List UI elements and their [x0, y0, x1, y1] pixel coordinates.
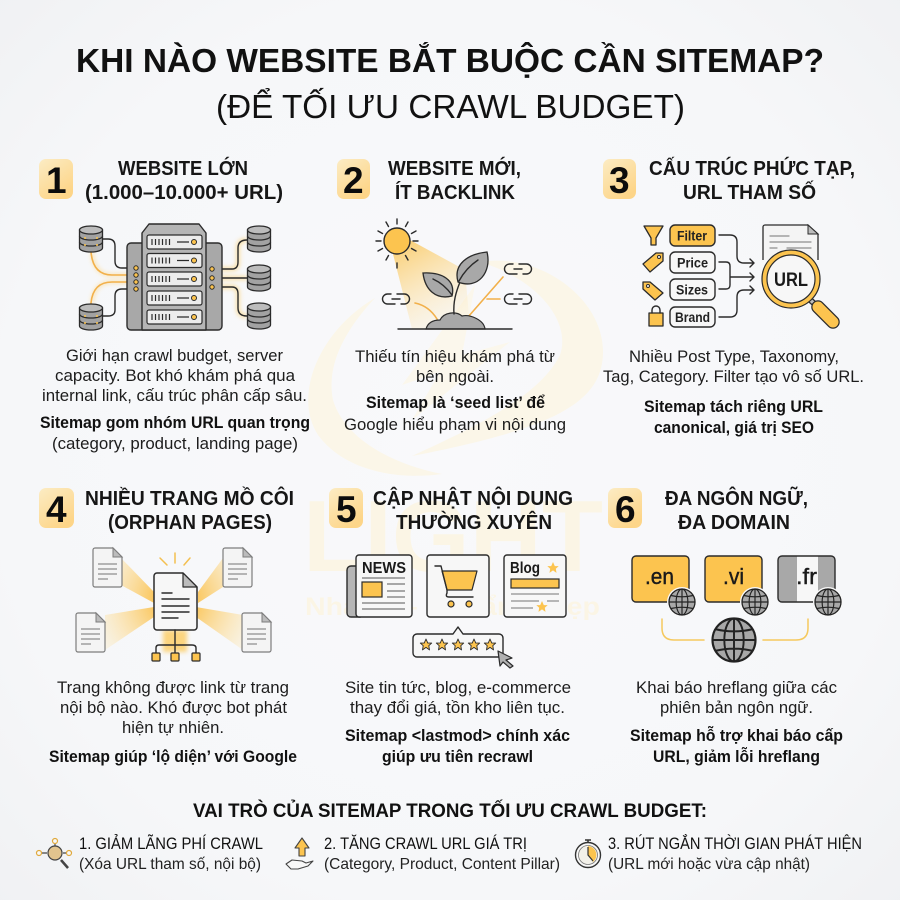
icon: server with databases [80, 224, 270, 330]
text block 2: Thiếu tín hiệu khám phá từ [355, 348, 555, 366]
text block 3: Tag, Category. Filter tạo vô số URL. [603, 368, 864, 386]
badge 5 [329, 488, 363, 530]
text block 4: Sitemap giúp ‘lộ diện’ với Google [49, 748, 297, 766]
text block 3: Sitemap tách riêng URL [644, 398, 823, 416]
text block 6: phiên bản ngôn ngữ. [660, 699, 813, 717]
heading 4 [85, 486, 294, 534]
role 3 text: 3. RÚT NGẮN THỜI GIAN PHÁT HIỆN [608, 834, 862, 853]
text block 3 [603, 348, 864, 437]
badge 1 [39, 159, 73, 201]
text block 1: Giới hạn crawl budget, server [66, 347, 284, 365]
heading 6: ĐA DOMAIN [678, 512, 790, 534]
icon: magnifier network [36, 838, 72, 868]
badge 1: 1 [46, 160, 67, 201]
text block 1: Sitemap gom nhóm URL quan trọng [40, 414, 310, 432]
badge 3 [603, 159, 636, 201]
watermark logo [303, 261, 603, 621]
icon: language domains and globes: .en [645, 564, 674, 589]
heading 3 [649, 156, 855, 204]
panel 5: cập nhật nội dung [329, 486, 573, 766]
text block 1: (category, product, landing page) [52, 435, 298, 453]
badge 4 [39, 488, 74, 530]
icon: language domains and globes: .fr [796, 564, 817, 589]
text block 2: Sitemap là ‘seed list’ để [366, 394, 545, 412]
icon: stopwatch [576, 840, 600, 868]
icon: URL parameters to magnifier [643, 225, 833, 327]
icon: news, cart, blog, rating: NEWS [362, 560, 406, 577]
text block 1: internal link, cấu trúc phân cấp sâu. [42, 387, 307, 405]
footer: sitemap roles [36, 800, 862, 873]
badge 6 [608, 488, 642, 530]
text block 6: URL, giảm lỗi hreflang [653, 747, 820, 766]
icon: orphan documents [76, 548, 271, 661]
text block 1: capacity. Bot khó khám phá qua [55, 367, 296, 385]
role 2 text [324, 834, 560, 873]
icon: language domains and globes: .vi [723, 564, 744, 589]
badge 2: 2 [343, 160, 364, 201]
text block 4 [49, 679, 297, 766]
text block 1 [40, 347, 310, 453]
text block 6: Sitemap hỗ trợ khai báo cấp [630, 726, 843, 745]
icon: URL parameters to magnifier: URL [774, 270, 808, 291]
text block 5: giúp ưu tiên recrawl [382, 748, 533, 766]
heading 4: (ORPHAN PAGES) [108, 512, 272, 534]
icon: URL parameters to magnifier: Filter [677, 228, 708, 244]
heading 5 [373, 486, 573, 534]
panel 4: trang mồ côi [39, 486, 297, 766]
role 2 text: 2. TĂNG CRAWL URL GIÁ TRỊ [324, 834, 527, 853]
heading 1 [85, 156, 283, 204]
icon: news, cart, blog, rating: Blog [510, 560, 540, 577]
heading 2: WEBSITE MỚI, [388, 156, 521, 180]
role 2 text: (Category, Product, Content Pillar) [324, 856, 560, 873]
icon: URL parameters to magnifier: Brand [675, 310, 710, 325]
footer heading: VAI TRÒ CỦA SITEMAP TRONG TỐI ƯU CRAWL BUDGET: [193, 800, 707, 822]
text block 6 [630, 679, 843, 766]
heading 2: ÍT BACKLINK [395, 181, 516, 204]
title: KHI NÀO WEBSITE BẮT BUỘC CẦN SITEMAP? [76, 41, 824, 80]
icon: URL parameters to magnifier: Sizes [676, 282, 708, 298]
text block 5: thay đổi giá, tồn kho liên tục. [350, 699, 565, 717]
badge 3: 3 [609, 160, 630, 201]
text block 3: canonical, giá trị SEO [654, 419, 814, 437]
text block 5: Site tin tức, blog, e-commerce [345, 679, 571, 697]
heading 1: WEBSITE LỚN [118, 156, 248, 180]
heading 5: THƯỜNG XUYÊN [396, 510, 552, 534]
role 1 text [79, 833, 263, 873]
heading 1: (1.000–10.000+ URL) [85, 182, 283, 204]
role 1 text: 1. GIẢM LÃNG PHÍ CRAWL [79, 833, 263, 853]
text block 2 [344, 348, 566, 434]
role 3 [576, 834, 862, 873]
role 3 text: (URL mới hoặc vừa cập nhật) [608, 856, 810, 873]
watermark logo: Nhanh – Chuẩn – Đẹp [305, 593, 600, 621]
badge 6: 6 [615, 489, 636, 530]
title [76, 41, 824, 126]
heading 4: NHIỀU TRANG MỒ CÔI [85, 486, 294, 510]
role 1 [36, 833, 263, 873]
icon: URL parameters to magnifier: Price [677, 256, 708, 270]
panel 6: đa ngôn ngữ [608, 486, 843, 766]
role 1 text: (Xóa URL tham số, nội bộ) [79, 856, 261, 873]
heading 6: ĐA NGÔN NGỮ, [665, 486, 808, 510]
text block 3: Nhiều Post Type, Taxonomy, [629, 348, 839, 366]
panel 1: website lớn [39, 156, 310, 453]
text block 6: Khai báo hreflang giữa các [636, 679, 837, 697]
heading 3: CẤU TRÚC PHỨC TẠP, [649, 156, 855, 180]
role 2 [286, 834, 560, 873]
text block 5 [345, 679, 571, 766]
panel 2: website mới [337, 156, 566, 434]
role 3 text [608, 834, 862, 873]
badge 4: 4 [46, 489, 67, 530]
heading 5: CẬP NHẬT NỘI DUNG [373, 486, 573, 510]
icon: hand with up arrow [286, 838, 313, 869]
heading 3: URL THAM SỐ [683, 180, 816, 204]
badge 2 [337, 159, 370, 201]
icon: sun, seedling and links [376, 219, 532, 329]
text block 4: Trang không được link từ trang [57, 679, 289, 697]
text block 2: bên ngoài. [416, 368, 494, 386]
heading 2 [388, 156, 521, 204]
text block 2: Google hiểu phạm vi nội dung [344, 416, 566, 434]
panel 3: cấu trúc phức tạp [603, 156, 864, 437]
watermark logo: LIGHT [303, 481, 603, 593]
text block 5: Sitemap <lastmod> chính xác [345, 727, 570, 745]
text block 4: hiện tự nhiên. [122, 719, 224, 737]
title: (ĐỂ TỐI ƯU CRAWL BUDGET) [216, 87, 685, 126]
text block 4: nội bộ nào. Khó được bot phát [60, 699, 287, 717]
icon: language domains and globes [632, 556, 843, 662]
icon: news, cart, blog, rating [347, 555, 566, 668]
badge 5: 5 [336, 489, 357, 530]
heading 6 [665, 486, 808, 534]
